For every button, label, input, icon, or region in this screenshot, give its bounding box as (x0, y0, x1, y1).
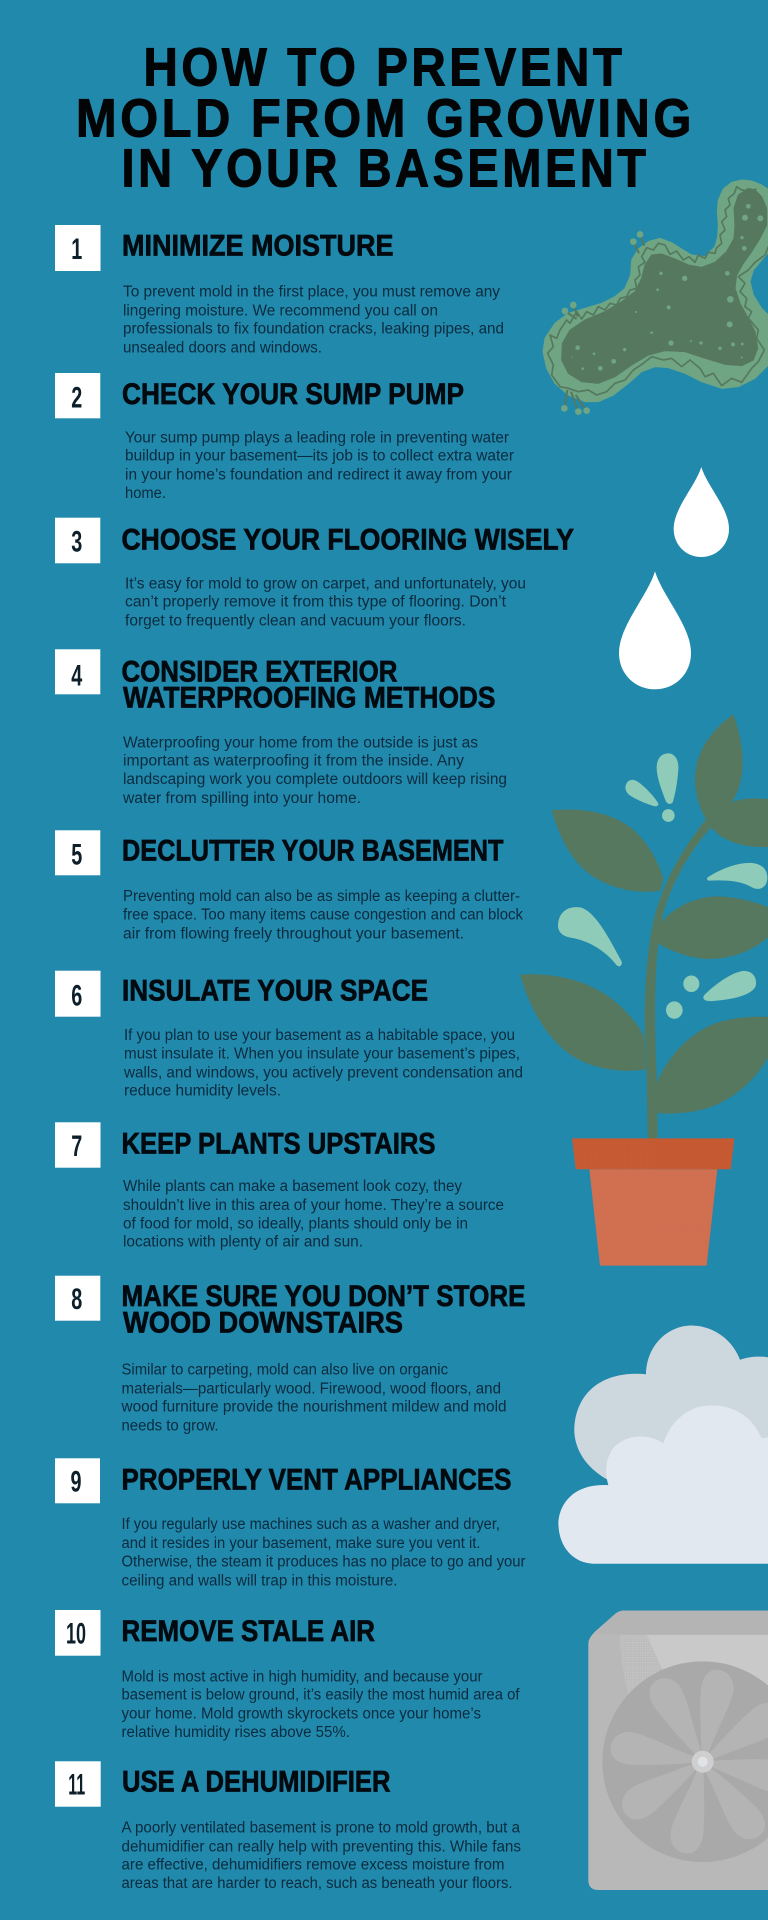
body 6: reduce humidity levels. (124, 1083, 281, 1100)
number box 2: 2 (71, 381, 82, 414)
heading 10: REMOVE STALE AIR (122, 1615, 375, 1648)
step 4 (55, 649, 507, 807)
number box 10: 10 (66, 1617, 86, 1650)
step 9 (55, 1458, 526, 1589)
step 6 (55, 971, 523, 1100)
body 8: Similar to carpeting, mold can also live on organic (122, 1361, 448, 1378)
heading 7: KEEP PLANTS UPSTAIRS (122, 1128, 436, 1161)
title (76, 38, 695, 198)
body 2: buildup in your basement—its job is to collect extra water (125, 448, 514, 465)
body 9: Otherwise, the steam it produces has no place to go and your (122, 1553, 526, 1570)
body 11: A poorly ventilated basement is prone to mold growth, but a (122, 1819, 520, 1836)
number box 10 (55, 1610, 100, 1656)
body 4: water from spilling into your home. (122, 790, 361, 807)
step 11 (55, 1761, 521, 1892)
body 10: basement is below ground, it’s easily the most humid area of (122, 1687, 520, 1704)
body 10 (122, 1668, 520, 1741)
icon: large water drop (619, 571, 691, 689)
step 1 (55, 225, 504, 357)
heading 3: CHOOSE YOUR FLOORING WISELY (122, 523, 574, 556)
body 1: professionals to fix foundation cracks, leaking pipes, and (123, 321, 504, 338)
body 5: air from flowing freely throughout your basement. (123, 925, 464, 942)
heading 1: MINIMIZE MOISTURE (122, 230, 394, 263)
body 8: wood furniture provide the nourishment mildew and mold (121, 1399, 506, 1416)
body 1: lingering moisture. We recommend you call on (123, 302, 438, 319)
body 4: Waterproofing your home from the outside is just as (123, 734, 478, 751)
body 1: unsealed doors and windows. (123, 340, 322, 357)
number box 6: 6 (71, 980, 82, 1013)
number box 11 (55, 1761, 101, 1807)
number box 7 (55, 1122, 100, 1168)
body 8 (121, 1361, 506, 1435)
number box 5 (55, 830, 100, 875)
number box 9 (55, 1458, 100, 1503)
body 3: It’s easy for mold to grow on carpet, and unfortunately, you (125, 575, 526, 592)
heading 8: WOOD DOWNSTAIRS (123, 1306, 403, 1339)
number box 9: 9 (70, 1466, 82, 1499)
body 8: needs to grow. (122, 1418, 218, 1435)
title: MOLD FROM GROWING (76, 89, 695, 148)
body 7: While plants can make a basement look cozy, they (123, 1178, 462, 1195)
body 11: dehumidifier can really help with preventing this. While fans (122, 1838, 521, 1855)
heading 9: PROPERLY VENT APPLIANCES (122, 1463, 512, 1496)
illustration: air conditioner fan unit (588, 1611, 768, 1890)
title: IN YOUR BASEMENT (122, 139, 650, 198)
body 7: locations with plenty of air and sun. (123, 1234, 363, 1251)
body 11: areas that are harder to reach, such as beneath your floors. (122, 1875, 512, 1892)
body 8: materials—particularly wood. Firewood, wood floors, and (122, 1380, 501, 1397)
heading 4: CONSIDER EXTERIOR (122, 656, 398, 689)
step 5 (55, 830, 523, 942)
step 2 (55, 373, 514, 502)
body 10: your home. Mold growth skyrockets once your home’s (122, 1706, 481, 1723)
number box 2 (55, 373, 100, 418)
illustration: mold blob (543, 180, 768, 415)
body 3: forget to frequently clean and vacuum your floors. (125, 613, 466, 630)
body 5: free space. Too many items cause congestion and can block (123, 906, 523, 923)
body 1: To prevent mold in the first place, you must remove any (123, 283, 500, 300)
heading 11: USE A DEHUMIDIFIER (122, 1766, 390, 1799)
body 5: Preventing mold can also be as simple as keeping a clutter- (123, 888, 520, 905)
heading 4 (122, 656, 496, 714)
body 11: are effective, dehumidifiers remove excess moisture from (122, 1857, 504, 1874)
body 6: walls, and windows, you actively prevent condensation and (123, 1064, 523, 1081)
body 3: can’t properly remove it from this type of flooring. Don’t (125, 594, 507, 611)
number box 5: 5 (71, 838, 82, 871)
heading 5: DECLUTTER YOUR BASEMENT (122, 835, 504, 868)
illustration: clouds (558, 1326, 768, 1564)
icon: small water drop (674, 467, 729, 557)
heading 6: INSULATE YOUR SPACE (122, 975, 428, 1008)
heading 4: WATERPROOFING METHODS (123, 681, 496, 714)
title: HOW TO PREVENT (144, 38, 626, 97)
body 9 (122, 1516, 526, 1589)
body 9: If you regularly use machines such as a washer and dryer, (122, 1516, 500, 1533)
body 4: important as waterproofing it from the inside. Any (123, 753, 464, 770)
heading 8 (122, 1280, 526, 1339)
body 6: If you plan to use your basement as a habitable space, you (124, 1027, 515, 1044)
body 9: and it resides in your basement, make sure you vent it. (122, 1535, 480, 1552)
number box 1 (55, 225, 100, 271)
number box 8 (55, 1276, 100, 1321)
body 6 (123, 1027, 523, 1100)
body 10: relative humidity rises above 55%. (122, 1724, 350, 1741)
body 9: ceiling and walls will trap in this moisture. (122, 1572, 398, 1589)
heading 2: CHECK YOUR SUMP PUMP (122, 378, 464, 411)
body 3 (125, 575, 526, 630)
body 4 (122, 734, 507, 807)
body 2: home. (125, 485, 166, 502)
body 5 (123, 888, 523, 942)
step 8 (55, 1276, 526, 1435)
body 2: in your home’s foundation and redirect it away from your (125, 467, 512, 484)
number box 8: 8 (71, 1283, 82, 1316)
number box 3: 3 (71, 526, 82, 559)
number box 4: 4 (71, 660, 82, 693)
body 10: Mold is most active in high humidity, and because your (122, 1668, 482, 1685)
number box 1: 1 (71, 233, 82, 266)
number box 7: 7 (71, 1130, 82, 1163)
body 7: shouldn’t live in this area of your home. They’re a source (123, 1197, 504, 1214)
step 10 (55, 1610, 520, 1741)
number box 4 (55, 649, 100, 694)
illustration: potted plant (520, 714, 768, 1266)
step 3 (55, 518, 574, 630)
body 4: landscaping work you complete outdoors will keep rising (123, 771, 507, 788)
body 7: of food for mold, so ideally, plants should only be in (123, 1215, 468, 1232)
number box 3 (55, 518, 100, 563)
body 11 (122, 1819, 521, 1892)
number box 11: 11 (68, 1768, 85, 1801)
heading 8: MAKE SURE YOU DON’T STORE (122, 1280, 526, 1313)
body 2: Your sump pump plays a leading role in preventing water (125, 429, 509, 446)
body 1 (123, 283, 504, 357)
body 2 (125, 429, 514, 502)
step 7 (55, 1122, 504, 1251)
body 7 (123, 1178, 504, 1251)
body 6: must insulate it. When you insulate your basement’s pipes, (124, 1045, 520, 1062)
number box 6 (55, 971, 100, 1017)
